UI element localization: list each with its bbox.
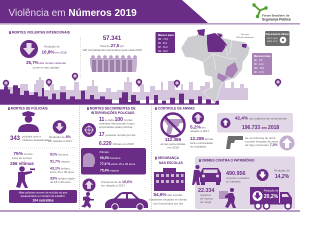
heading: escolas: ▮ SEGURANÇA bbox=[155, 156, 180, 160]
icon: down arrow bbox=[256, 169, 268, 181]
stat: 54,6%: brasileiras situadas em áreas bbox=[149, 198, 187, 202]
text: capitais: ocorrem nas capitais bbox=[33, 66, 60, 70]
stat: 112.386: armas apreendidas bbox=[161, 142, 186, 146]
stat: 22.334 bbox=[198, 188, 214, 204]
stat: 22.334: 22.334 bbox=[198, 188, 214, 194]
stat: 54,6%: com homicídios por dia bbox=[153, 202, 183, 206]
stat: 22.334: de carga bbox=[200, 200, 212, 204]
legend: lavender box: MG - 15,3 bbox=[254, 68, 265, 70]
stat: 75% bbox=[10, 151, 34, 166]
icon: down arrow circle bbox=[20, 40, 38, 58]
text: capitais bbox=[26, 60, 66, 70]
callout: suicidios: 104 suicídios bbox=[32, 198, 54, 202]
legend: lavender box: DF - 17,8 bbox=[254, 72, 264, 74]
callout: registros novas armas: 196.733 em 2018 bbox=[242, 125, 279, 131]
list: profile: de 18 a 29 anos bbox=[50, 180, 71, 184]
panel: intervencoes policiais bbox=[81, 106, 148, 210]
map of Brazil bbox=[181, 29, 250, 103]
stat: 343: 343 bbox=[10, 136, 21, 142]
legend: dark box: AP - 51,4 bbox=[158, 46, 168, 49]
text: porte ilegal: de fogo cresceram 7,3% bbox=[245, 143, 277, 147]
icon: car front bbox=[200, 168, 221, 185]
icon: people row bbox=[90, 55, 137, 72]
divider bbox=[80, 37, 82, 78]
map caption bbox=[236, 33, 255, 39]
stat: 12.285 bbox=[190, 136, 214, 148]
list: profile bbox=[50, 152, 75, 184]
icon: car thief bbox=[192, 165, 202, 185]
heading: mortes violentas: ▮ MORTES VIOLENTAS INTENCIONAIS bbox=[9, 30, 71, 34]
icon: police officer bbox=[18, 111, 39, 132]
pins bbox=[3, 73, 281, 88]
stat: 11 em 100: provocadas pelas polícias bbox=[99, 125, 133, 129]
panel: crimes contra o patrimonio bbox=[192, 156, 295, 209]
icon: truck: Redução de bbox=[264, 188, 279, 192]
legend: gray box: 2017: 30,8 bbox=[267, 38, 278, 40]
stat: 14,2%: 14,2% bbox=[275, 174, 290, 180]
callout: victims: Vítimas: bbox=[99, 150, 110, 154]
list: profile: 51,7% negros bbox=[50, 160, 70, 164]
stat: 11 em 100 bbox=[99, 117, 135, 129]
legend: dark box: RR - 71,8 bbox=[158, 39, 169, 41]
stat: 11 em 100: 11 a cada 100 mortes bbox=[99, 117, 133, 123]
icon: up arrow lavender bbox=[280, 136, 294, 150]
logo: Fórum Brasileiro de bbox=[262, 14, 290, 18]
stat: 5,2%: relação a 2017 bbox=[190, 129, 210, 133]
logo: Segurança Pública bbox=[262, 18, 291, 22]
text: porte ilegal: e posse irregular de arma bbox=[245, 140, 278, 144]
text: capitais: 25,7% das mortes violentas bbox=[26, 60, 66, 65]
panel: controle de armas bbox=[149, 106, 294, 206]
title: Violência em Números 2019 bbox=[8, 8, 137, 19]
stat: 490.956: ou furtados bbox=[226, 180, 241, 184]
skyline bbox=[0, 77, 248, 105]
icon: running man bbox=[81, 192, 94, 208]
panel: mortes de policiais bbox=[8, 106, 77, 203]
icon: up arrow small bbox=[192, 112, 204, 124]
text: crescimento bbox=[101, 180, 133, 188]
stat: 11 em 100: violentas intencionais foram bbox=[99, 122, 135, 126]
legend: gray box: 2018: 27,5 bbox=[267, 41, 278, 43]
stat: 57.341: 57.341 bbox=[103, 36, 122, 42]
logo bbox=[252, 3, 291, 22]
heading: policiais: ▮ MORTES DE POLICIAIS bbox=[8, 106, 49, 110]
map caption: 100 mil habitantes bbox=[236, 36, 255, 39]
callout: suicidios bbox=[9, 190, 77, 203]
stat: 112.386: 112.386 bbox=[165, 137, 182, 142]
stat: 17: 17 pessoas mortas por dia bbox=[99, 132, 136, 138]
stat: 12.285: foram extraviadas bbox=[190, 141, 214, 145]
stat: 12.285: ou roubadas bbox=[190, 144, 207, 148]
stat: 57.341: Taxa de 27,5 por bbox=[100, 43, 124, 48]
stat: 22.334: de roubos bbox=[200, 196, 213, 200]
stat: 5,2%: 5,2% em bbox=[190, 124, 206, 130]
text: porte ilegal bbox=[245, 136, 278, 147]
callout: registros novas armas bbox=[217, 113, 293, 132]
legend: lavender box: Menores taxas bbox=[254, 55, 271, 58]
stat: 14,2% bbox=[274, 168, 290, 180]
icon: up arrow bbox=[82, 178, 96, 192]
icon: target bbox=[82, 123, 96, 137]
callout: registros novas armas: 42,4% nos registros de novas armas bbox=[235, 116, 287, 120]
heading: intervencoes: INTERVENÇÕES POLICIAIS bbox=[91, 110, 135, 115]
stat: 490.956: 490.956 bbox=[226, 171, 246, 177]
callout: suicidios: Mais policiais morrem de suicídio do que bbox=[19, 190, 68, 194]
text: porte ilegal: As ocorrências de porte bbox=[245, 136, 276, 140]
stat: 75%: 256 vítimas bbox=[10, 161, 34, 166]
stat: 490.956 bbox=[226, 171, 250, 184]
icon: no guns bbox=[162, 114, 185, 136]
stat: 12.285: 12.285 armas bbox=[190, 136, 213, 141]
legend: dark box: PA - 53,1 bbox=[158, 42, 168, 45]
stat: 112.386 bbox=[161, 137, 186, 150]
stat: 22.334: registros bbox=[200, 193, 212, 197]
heading: intervencoes: ▮ MORTES DECORRENTES DE bbox=[87, 106, 136, 110]
icon: truck: 20,2% bbox=[264, 194, 279, 200]
legend: dark box bbox=[156, 32, 175, 53]
heading: patrimonio: ▮ CRIMES CONTRA O PATRIMÔNIO bbox=[199, 158, 255, 162]
icon: thief carrying box bbox=[219, 188, 236, 208]
stat: 75%: 75% mortos bbox=[13, 151, 33, 157]
callout: victims: 99,3% homens bbox=[100, 156, 121, 160]
icon: car bbox=[105, 192, 148, 210]
stat: 57.341 bbox=[82, 36, 142, 52]
list: profile: entre 30 e 49 anos bbox=[50, 170, 75, 174]
stat: 343: policiais civis e bbox=[22, 134, 42, 138]
map caption: Taxa por bbox=[241, 33, 249, 36]
stat: 57.341: 100 mil habitantes Homicídios para cada 2018 bbox=[82, 48, 142, 52]
text: crescimento: Crescimento de 19,6% bbox=[101, 180, 133, 184]
stat: 343: militares assassinados bbox=[22, 138, 52, 142]
text: reducao 10,8% bbox=[41, 44, 67, 54]
legend: dark box: CE - 54,0 bbox=[158, 51, 168, 53]
icon: truck bbox=[250, 187, 292, 209]
header band bbox=[0, 0, 300, 25]
callout: victims: 75,4% negros bbox=[100, 168, 120, 172]
callout: victims bbox=[81, 148, 146, 174]
stat: 54,6%: 54,6% das escolas bbox=[153, 192, 183, 197]
stat: 75%: Fora de serviço bbox=[12, 156, 32, 160]
legend: lavender box: SC - 12,1 bbox=[254, 64, 264, 66]
stat: 5,2% bbox=[190, 124, 210, 133]
legend: dark box: Maiores taxas bbox=[158, 34, 174, 37]
stat: 14,2%: Redução de bbox=[274, 168, 290, 172]
icon: shooter bbox=[16, 166, 35, 188]
text: reducao 8%: em relação a 2017 bbox=[48, 139, 72, 143]
callout: suicidios: assassinados em horário de trabalho: bbox=[21, 194, 66, 198]
icon: school bbox=[154, 168, 185, 191]
stat: 490.956: veículos roubados bbox=[226, 176, 250, 180]
legend: lavender box: SP - 9,5 bbox=[254, 60, 263, 62]
list: profile: 43,1% tinham bbox=[50, 166, 70, 170]
text: reducao 8%: Redução de 8% bbox=[49, 135, 72, 139]
list: profile: 91% homens bbox=[50, 152, 69, 156]
icon: revolver bbox=[226, 136, 243, 149]
footer band bbox=[0, 210, 300, 212]
stat: 6.220: 6.220 vítimas em 2018 bbox=[99, 141, 134, 147]
heading: escolas: NAS ESCOLAS bbox=[159, 161, 184, 165]
text: crescimento: em relação a 2017 bbox=[101, 184, 125, 188]
icon: down arrow bbox=[53, 120, 66, 134]
text: reducao 8% bbox=[48, 135, 72, 143]
stat: 343 bbox=[10, 134, 52, 142]
legend: lavender box bbox=[252, 53, 272, 75]
text: reducao 10,8%: 10,8% em 2018 bbox=[41, 50, 67, 54]
callout: victims: 77,9 % entre 15 e 29 anos bbox=[100, 162, 136, 166]
stat: 112.386: em 2018 bbox=[167, 146, 179, 150]
heading: intervencoes bbox=[87, 106, 136, 115]
text: reducao 10,8%: Redução de bbox=[44, 44, 60, 48]
heading: escolas bbox=[155, 156, 184, 165]
heading: armas: ▮ CONTROLE DE ARMAS bbox=[155, 106, 195, 110]
stat: 54,6% bbox=[149, 192, 187, 206]
legend: gray box bbox=[265, 31, 290, 46]
list: profile: 33% tinham idade bbox=[50, 176, 75, 180]
legend: gray box: Taxa anual de vítimas bbox=[265, 33, 290, 36]
